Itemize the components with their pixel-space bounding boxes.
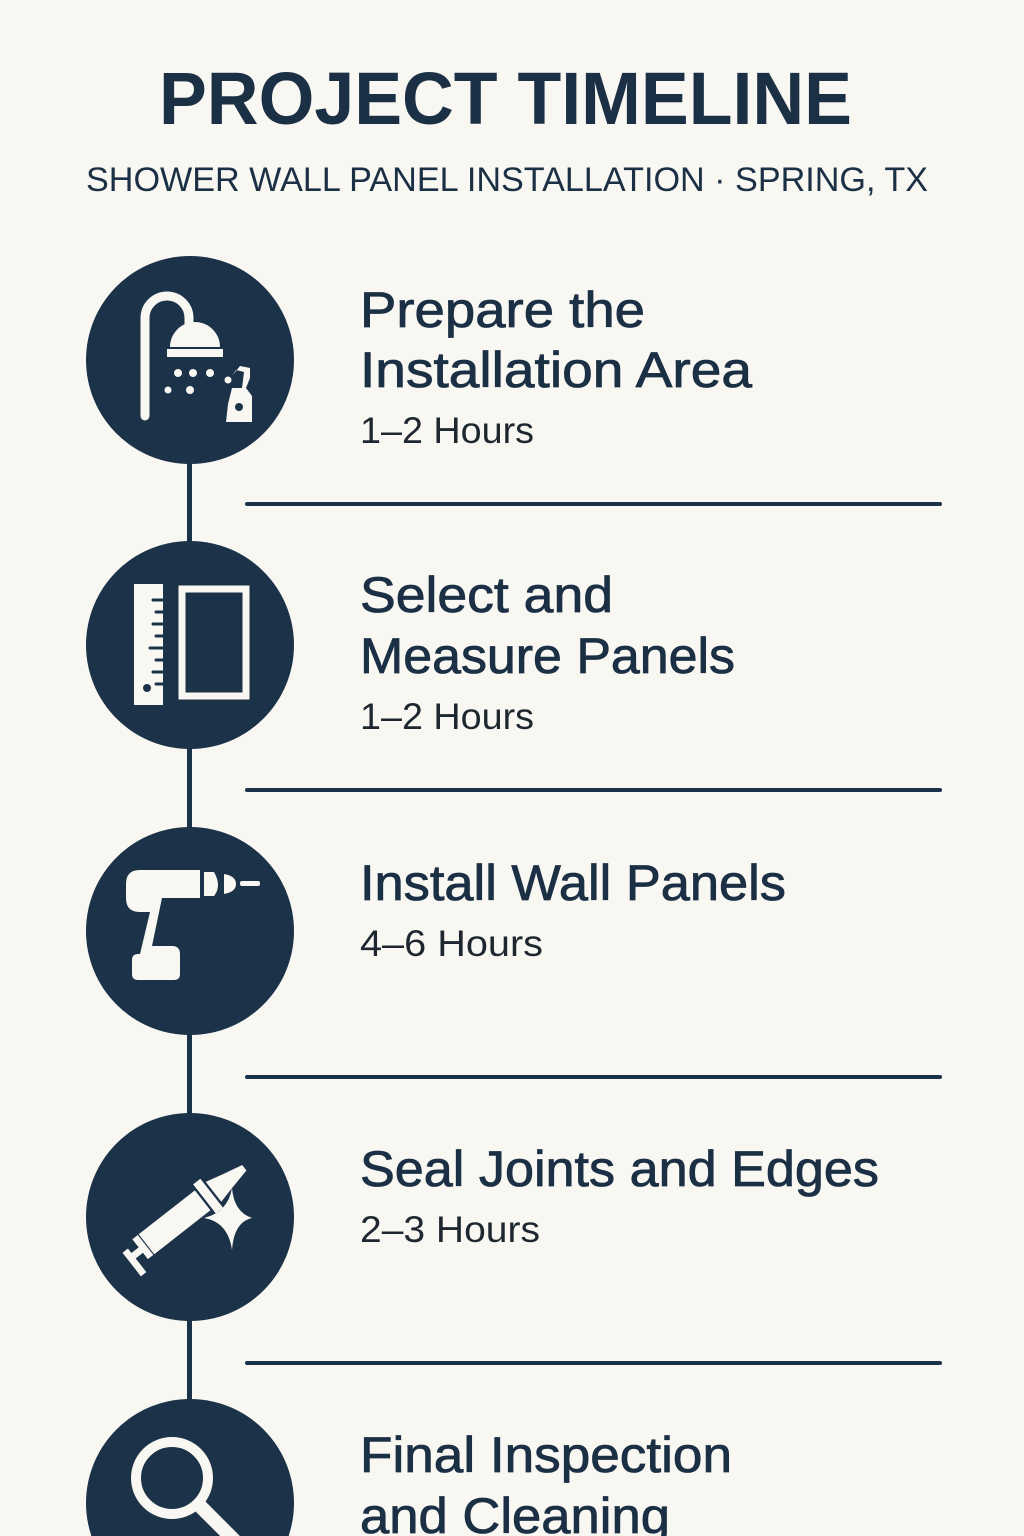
step title: Select and [360,567,613,623]
icon: drill [86,827,294,1035]
step 2: select and measure [86,541,735,749]
icon: shower and spray bottle [86,256,294,464]
duration: 4–6 Hours [360,923,543,964]
duration: 2–3 Hours [360,1209,540,1250]
title: PROJECT TIMELINE [159,57,852,140]
icon: caulk gun and sparkle [86,1113,294,1321]
duration: 1–2 Hours [360,410,534,451]
icon: ruler and panel [86,541,294,749]
step 5: inspection [86,1399,732,1536]
step title: Install Wall Panels [360,855,786,911]
timeline connector line [187,400,192,1536]
step 2: select and measure: Measure Panels [360,628,735,684]
step 1: prepare area [86,256,752,464]
subtitle: SHOWER WALL PANEL INSTALLATION · SPRING, TX [86,161,928,199]
step title: Seal Joints and Edges [360,1141,879,1197]
step 1: prepare area: Installation Area [360,342,752,398]
step title: Prepare the [360,282,645,338]
step 3: install [86,827,786,1035]
step title: Final Inspection [360,1427,732,1483]
icon: magnifier [86,1399,294,1536]
duration: 1–2 Hours [360,696,534,737]
step 4: seal [86,1113,879,1321]
